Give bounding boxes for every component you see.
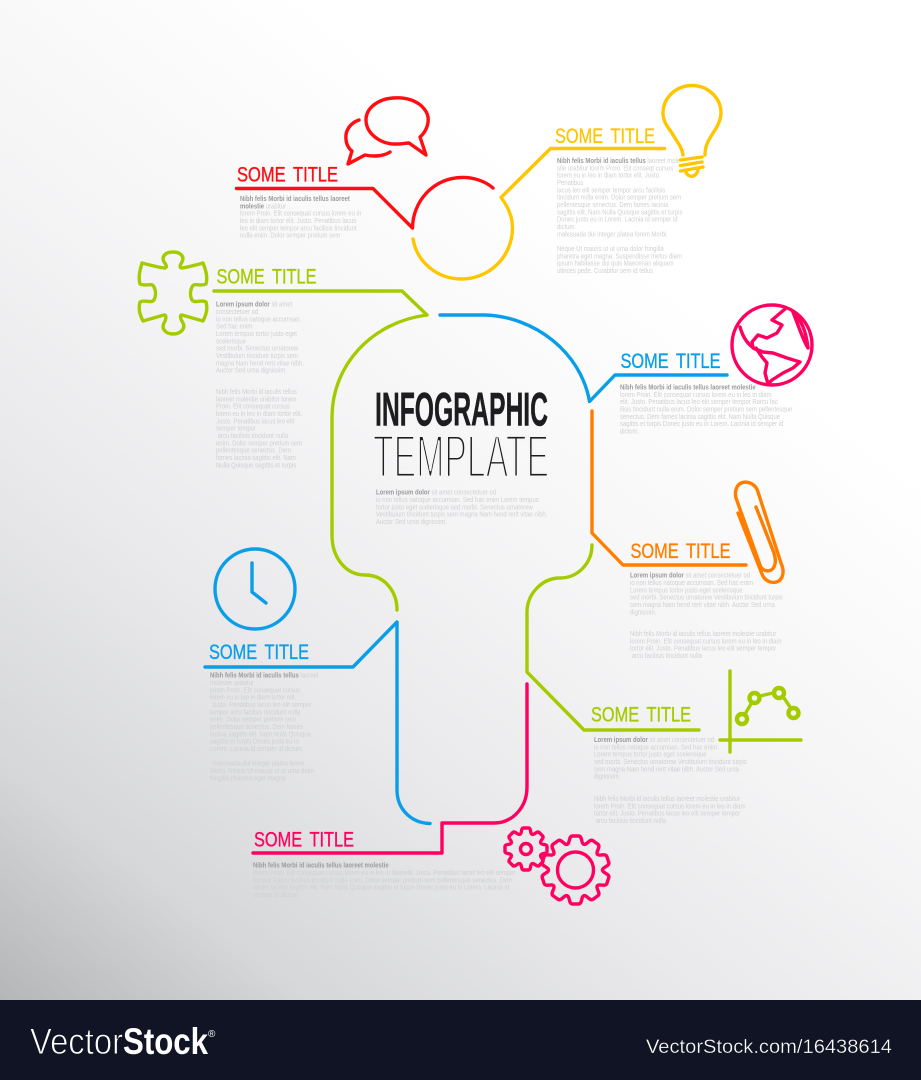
pink text block xyxy=(253,862,516,899)
green text block: enim. Dolor semper pretium sem xyxy=(216,440,302,447)
orange text block: lorem Proin. Elit consequat cursus lorem eu in leo in diam xyxy=(630,638,782,645)
orange text block: Nibh felis Morbi id iaculis tellus laoreet molestie urabitur xyxy=(630,631,777,638)
red text block: molestie urabitur xyxy=(240,203,286,210)
yellow connector and circle arc xyxy=(413,148,664,279)
blue text block: elit. Justo. Penatibus lacus leo elit semper tempor Rarcu fac xyxy=(620,399,778,406)
lime text block: tortor elit. Justo. Penatibus lacus leo elit semper tempor xyxy=(594,810,741,818)
red title: SOME TITLE xyxy=(237,164,338,186)
green text block: pellentesque senectus. Dem xyxy=(216,447,291,455)
green text block: Lorem tempus tortor justo eget xyxy=(216,331,297,338)
blue left text block: Morbi. Neque Ut mauris ut ut urna dolor xyxy=(210,768,315,775)
icon: gears xyxy=(505,828,610,904)
orange connector xyxy=(592,411,746,565)
green text block: Auctor Sed urna dignissim. xyxy=(216,367,287,375)
panel: blue clock section xyxy=(205,549,430,824)
yellow text block: pharetra eget magna. Suspendisse metus diam xyxy=(557,253,682,260)
green text block: consectetuer od xyxy=(216,309,259,316)
red text block: leo elit semper tempor arcu facilisis tincidunt xyxy=(240,225,357,232)
lime text block: sed morbi. Senectus urnatorew Vestibulum tincidunt turpis xyxy=(594,759,748,766)
yellow text block xyxy=(557,158,683,275)
panel: yellow section xyxy=(413,86,721,279)
orange text block: Lorem tempus tortor justo eget scelerisque xyxy=(630,587,743,595)
intro text block: Lorem ipsum dolor sit amet consectetuer od xyxy=(376,489,496,497)
yellow text block: sagittis elit. Nam Nulla Quisque sagittis et turpis xyxy=(557,209,683,216)
yellow text block: ipsum habitasse dui quis Maecenas aliquam xyxy=(557,260,674,268)
intro text block: Auctor Sed urna dignissim. xyxy=(376,519,447,526)
red text block xyxy=(240,196,362,240)
yellow text block: Penatibus xyxy=(557,180,584,187)
lime text block xyxy=(594,737,748,825)
green text block: Lorem ipsum dolor sit amet xyxy=(216,301,292,309)
pink text block: semper id dictum. xyxy=(253,892,300,899)
panel: lime green puzzle section xyxy=(139,252,427,610)
yellow text block: pellentesque senectus. Dem fames lacinia xyxy=(557,202,669,209)
lime text block: Lorem ipsum dolor sit amet consectetuer od xyxy=(594,737,714,744)
blue left text block xyxy=(210,672,319,783)
intro text block: Vestibulum tincidunt turpis sem magna Nam hend rerit vitae nibh. xyxy=(376,511,548,519)
footer: VectorStock logo: Vector xyxy=(30,1021,123,1062)
icon: paper clip xyxy=(735,482,783,582)
green text block: sed morbi. Senectus urnatorew xyxy=(216,345,298,353)
green title: SOME TITLE xyxy=(216,266,316,288)
blue text block xyxy=(620,384,793,436)
blue title: SOME TITLE xyxy=(620,350,720,373)
orange title: SOME TITLE xyxy=(630,540,730,563)
blue left title: SOME TITLE xyxy=(209,641,309,664)
yellow text block: lacus leo elit semper tempor arcu facilisis xyxy=(557,187,666,194)
yellow text block: stie urabitur lorem Proin. Elit conseqt cursus xyxy=(557,165,674,172)
heading: INFOGRAPHIC: INFOGRAPHIC xyxy=(375,384,548,436)
green text block: laoreet molestie urabitur lorem xyxy=(216,396,296,403)
pink text block: lorem Proin. Elit consequat cursus lorem eu in leo in diametit. Justo. Penatibus lacus leo elit semper xyxy=(253,870,516,877)
blue left text block: enim. Dolor semper pretium sem xyxy=(210,716,296,724)
yellow text block: Neque Ut mauris ut ut urna dolor fringilla xyxy=(557,246,664,253)
green text block: Sed hac enim xyxy=(216,323,252,331)
panel: pink section xyxy=(253,684,610,904)
panel: blue globe section xyxy=(440,305,812,436)
green text block: arcu facilisis tincidunt nulla xyxy=(218,433,288,440)
panel: orange section xyxy=(592,411,784,660)
pink text block: Nibh felis Morbi id iaculis tellus laoreet molestie xyxy=(253,862,389,870)
lime text block: Lorem tempus tortor justo eget scelerisque xyxy=(594,751,707,759)
intro text block xyxy=(376,489,548,526)
panel: red section xyxy=(236,98,493,240)
icon: speech bubbles xyxy=(346,98,428,164)
blue left text block: lorem eu in leo in diam tortor elit. xyxy=(210,694,296,702)
blue left text block: tempor arcu facilisis tincidunt nulla xyxy=(210,709,301,717)
blue left text block: Justo. Penatibus lacus leo elit semper xyxy=(212,702,312,709)
blue left text block: lorem Proin. Elit consequat cursus xyxy=(210,687,301,695)
icon: light bulb xyxy=(663,86,721,176)
lime text block: arcu facilisis tincidunt nulla xyxy=(596,818,666,825)
heading: TEMPLATE: TEMPLATE xyxy=(373,423,549,490)
lime text block: sem magna Nam hend rerit vitae nibh. Auctor Sed urna xyxy=(594,766,739,773)
green text block: Nulla Quisque sagittis et turpis xyxy=(216,462,297,469)
blue left connector and head outline xyxy=(205,622,430,824)
orange text block: sed morbi. Senectus urnatorew Vestibulum tincidunt turpis xyxy=(630,594,784,602)
yellow text block: dictum. xyxy=(557,224,576,231)
orange text block: dignissim. xyxy=(630,609,657,617)
footer: VectorStock logo xyxy=(30,1021,216,1062)
orange text block: tortor elit. Justo. Penatibus lacus leo elit semper tempor xyxy=(630,645,777,653)
green text block: Vestibulum tincidunt turpis sem xyxy=(216,353,298,360)
blue left text block: malesuada dui integer platea lorem xyxy=(212,760,304,768)
lime title: SOME TITLE xyxy=(591,704,691,726)
red connector and circle arc xyxy=(236,177,493,228)
blue text block: senectus. Dem fames lacinia sagittis elit. Nam Nulla Quisque xyxy=(620,413,780,421)
footer: VectorStock logo: Stock xyxy=(123,1021,208,1062)
panel: main heading xyxy=(373,384,549,526)
yellow title: SOME TITLE xyxy=(555,125,655,148)
green text block: fames lacinia sagittis elit. Nam xyxy=(216,455,296,462)
orange text block: arcu facilisis tincidunt nulla xyxy=(632,653,702,660)
yellow text block: Donec justo eu in Lorem. Lacinia id semper id xyxy=(557,216,678,224)
red text block: nulla enim. Dolor semper pretium sem xyxy=(240,232,340,240)
icon: globe xyxy=(732,305,812,385)
red text block: Nibh felis Morbi id iaculis tellus laoreet xyxy=(240,196,351,203)
orange text block xyxy=(630,572,784,660)
orange text block: io non tellus natoque accumsan. Sed hac enim xyxy=(630,580,753,587)
orange text block: sem magna Nam hend rerit vitae nibh. Auctor Sed urna xyxy=(630,602,775,609)
blue text block: ilisis tincidunt nulla enim. Dolor semper pretium sem pellentesque xyxy=(620,406,793,414)
icon: clock xyxy=(215,549,295,629)
yellow text block: Nibh felis Morbi id iaculis tellus laoreet mole xyxy=(557,158,680,165)
green text block: scelerisque xyxy=(216,338,246,346)
pink title: SOME TITLE xyxy=(254,828,354,852)
footer: image id: VectorStock.com/16438614 xyxy=(646,1037,892,1058)
blue text block: sagittis et turpis Donec justo eu in Lorem. Lacinia id semper id xyxy=(620,421,784,428)
lime text block: dignissim. xyxy=(594,773,621,781)
pink text block: tempor Rarcu facilisis tincidunt nulla enim. Dolor semper pretium sem pellentesque senectus. Dem xyxy=(253,877,512,885)
green text block: lorem eu in leo in diam tortor elit. xyxy=(216,411,302,418)
yellow text block: tincidunt nulla enim. Dolor semper pretium sem xyxy=(557,194,681,202)
lime text block: lorem Proin. Elit consequat cursus lorem eu in leo in diam xyxy=(594,803,746,810)
yellow text block: lorem eu in leo in diam tortor elit. Justo. xyxy=(557,172,661,180)
blue left text block: pellentesque senectus. Dem fames xyxy=(210,724,303,731)
green text block: semper tempor xyxy=(216,425,257,433)
blue left text block: fringilla pharetra eget magna. xyxy=(210,775,287,783)
green connector and head outline left side xyxy=(214,291,427,610)
icon: puzzle piece xyxy=(139,252,207,334)
lime connector and head outline right side xyxy=(527,545,699,730)
green text block: Proin. Elit consequat cursus xyxy=(216,403,290,411)
red text block: leo in diam tortor elit. Justo. Penatibus lacus xyxy=(240,218,357,225)
orange text block: Lorem ipsum dolor sit amet consectetuer od xyxy=(630,572,750,580)
intro text block: tortor justo eget scelerisque sed morbi. Senectus urnatorew xyxy=(376,504,533,512)
yellow text block: malesuada dui integer platea lorem Morbi. xyxy=(557,231,668,238)
footer: VectorStock logo: ® xyxy=(208,1029,216,1040)
lime text block: Nibh felis Morbi id iaculis tellus laoreet molestie urabitur xyxy=(594,796,741,803)
green text block: Nibh felis Morbi id iaculis tellus xyxy=(216,389,298,396)
lime text block: io non tellus natoque accumsan. Sed hac enim xyxy=(594,744,717,751)
blue left text block: Lorem. Lacinia id semper id dictum. xyxy=(210,746,304,753)
blue left text block: lacinia sagittis elit. Nam Nulla Quisque xyxy=(210,731,311,739)
pink text block: fames lacinia sagittis elit. Nam Nulla Quisque sagittis et turpis Donec justo eu in Lorem. Lacinia id xyxy=(253,884,510,892)
green text block: magna Nam hend rerit vitae nibh. xyxy=(216,360,304,368)
blue text block: dictum. xyxy=(620,428,639,436)
intro text block: io non tellus natoque accumsan. Sed hac enim Lorem tempus xyxy=(376,497,539,504)
pink connector and head outline bottom xyxy=(253,684,527,853)
blue text block: lorem Proin. Elit consequat cursus lorem eu in leo in diam xyxy=(620,391,772,399)
green text block: io non tellus natoque accumsan. xyxy=(216,316,301,324)
green text block: Justo. Penatibus lacus leo elit xyxy=(216,418,294,425)
red text block: lorem Proin. Elit consequat cursus lorem eu in xyxy=(240,210,362,218)
yellow text block: ultrices pede. Curabitur sem id tellus xyxy=(557,268,654,275)
blue text block: Nibh felis Morbi id iaculis tellus laoreet molestie xyxy=(620,384,756,392)
green text block xyxy=(216,301,304,469)
blue connector and head outline top xyxy=(440,315,727,402)
blue left text block: molestie urabitur xyxy=(210,680,255,687)
icon: line chart xyxy=(720,671,801,752)
panel: green chart section xyxy=(527,545,801,825)
blue left text block: Nibh felis Morbi id iaculis tellus laoreet xyxy=(210,672,319,680)
blue left text block: sagittis et turpis Donec justo eu in xyxy=(210,738,299,746)
